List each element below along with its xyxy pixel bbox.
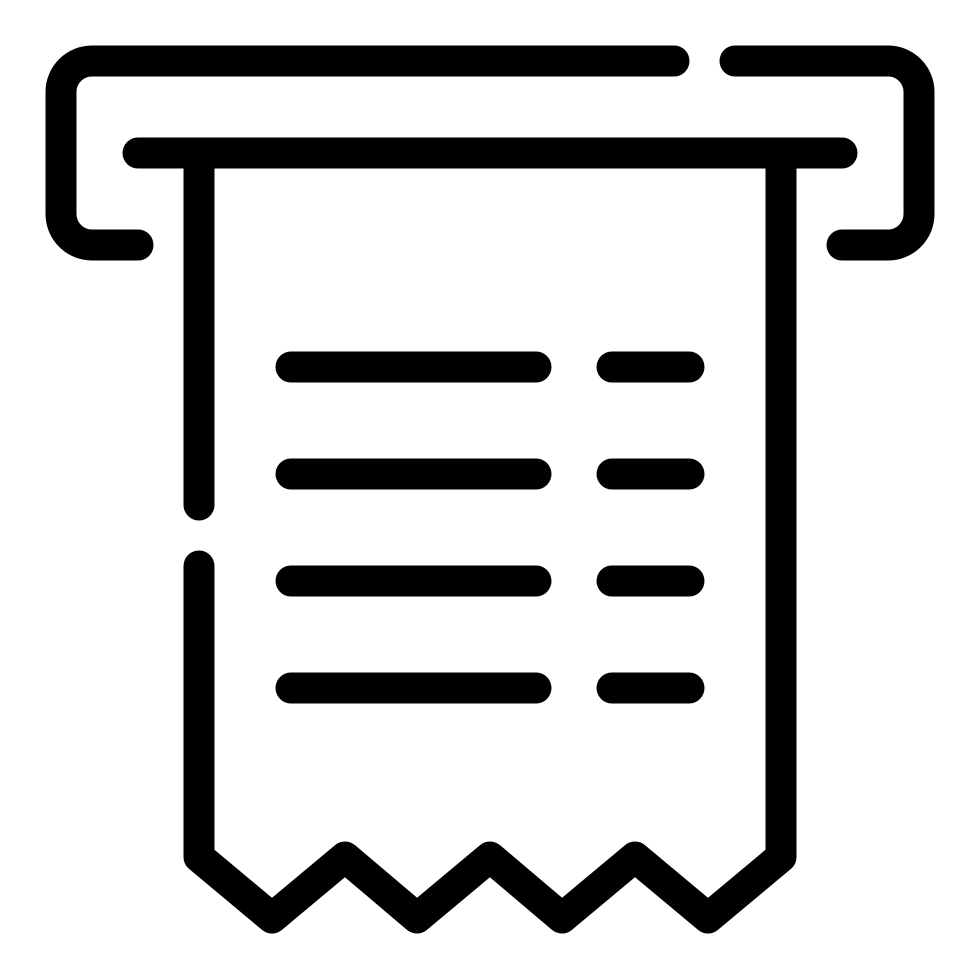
printer slot outline — [61, 61, 919, 245]
slot bar — [138, 138, 842, 168]
receipt paper outline — [199, 153, 781, 918]
receipt line items — [291, 367, 689, 688]
